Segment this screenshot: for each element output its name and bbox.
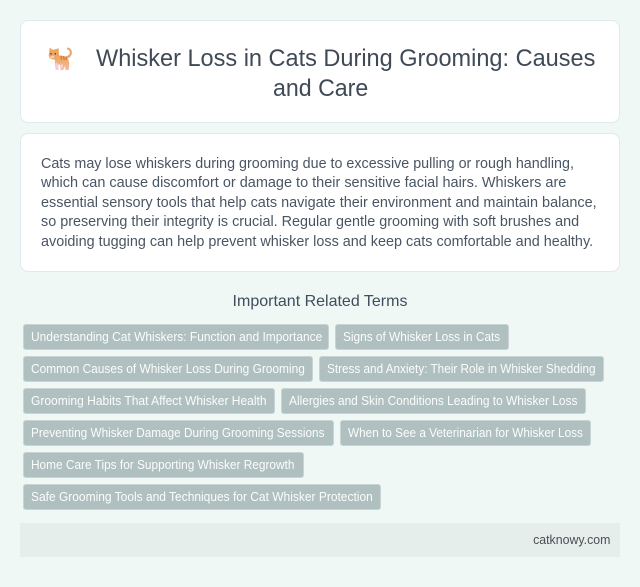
tag	[340, 420, 591, 446]
title line 1: Whisker Loss in Cats During Grooming: Causes	[96, 45, 595, 72]
tag: Home Care Tips for Supporting Whisker Regrowth	[31, 457, 294, 472]
tag: When to See a Veterinarian for Whisker Loss	[348, 425, 583, 440]
tag	[23, 420, 334, 446]
tag: Preventing Whisker Damage During Grooming Sessions	[31, 425, 324, 440]
tag: Safe Grooming Tools and Techniques for Cat Whisker Protection	[31, 489, 373, 504]
tag	[23, 484, 381, 510]
tag	[23, 356, 313, 382]
footer source text: catknowy.com	[533, 532, 610, 547]
summary paragraph: which can cause discomfort or damage to their sensitive facial hairs. Whiskers are	[41, 174, 566, 191]
heading: title	[96, 45, 595, 102]
tag	[23, 388, 275, 414]
heading: important related terms: Important Related Terms	[233, 293, 407, 310]
tag: Grooming Habits That Affect Whisker Health	[31, 393, 267, 408]
summary paragraph: so preserving their integrity is crucial. Regular gentle grooming with soft brushes and	[41, 213, 579, 230]
footer bar	[20, 523, 620, 557]
title line 2: and Care	[273, 75, 368, 102]
tag: Common Causes of Whisker Loss During Grooming	[31, 361, 305, 376]
tag	[23, 452, 304, 478]
tag: Signs of Whisker Loss in Cats	[343, 329, 500, 344]
summary paragraph	[41, 155, 597, 250]
panel: summary text	[20, 133, 620, 272]
tag	[335, 324, 509, 350]
panel: related term tags	[23, 324, 604, 510]
summary paragraph: essential sensory tools that help cats navigate their environment and maintain balance,	[41, 194, 597, 211]
summary paragraph: Cats may lose whiskers during grooming due to excessive pulling or rough handling,	[41, 155, 574, 172]
tag	[23, 324, 329, 350]
tag	[281, 388, 586, 414]
icon: cat	[48, 48, 72, 70]
summary paragraph: avoiding tugging can help prevent whisker loss and keep cats comfortable and healthy.	[41, 233, 593, 250]
tag: Allergies and Skin Conditions Leading to Whisker Loss	[289, 393, 577, 408]
tag	[319, 356, 604, 382]
tag: Understanding Cat Whiskers: Function and Importance	[31, 329, 322, 344]
panel: title card	[20, 20, 620, 123]
tag: Stress and Anxiety: Their Role in Whisker Shedding	[327, 361, 596, 376]
